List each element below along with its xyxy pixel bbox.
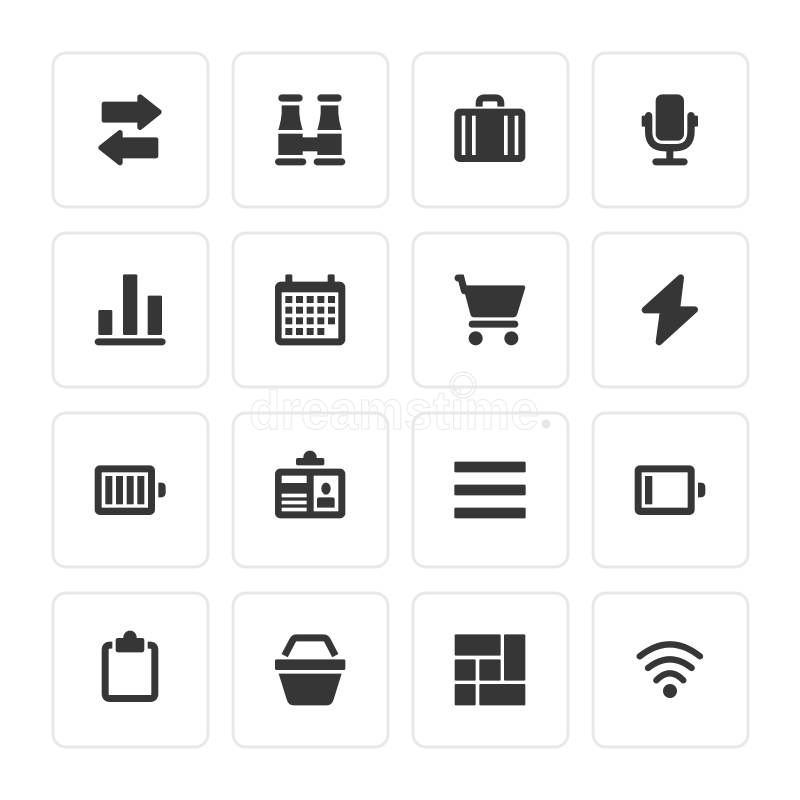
panel: calendar (233, 233, 388, 387)
icon: menu lines (454, 462, 526, 518)
panel: lightning bolt (593, 233, 748, 387)
icon: low battery (635, 465, 705, 515)
icon: clipboard (105, 631, 155, 698)
card frame (413, 593, 568, 747)
card frame (53, 413, 208, 567)
card frame (593, 413, 748, 567)
panel: full battery (53, 413, 208, 567)
card frame (413, 233, 568, 387)
card frame (233, 593, 388, 747)
icon: wifi (640, 644, 700, 698)
icon: microphone (642, 94, 698, 165)
watermark logo rings (450, 372, 476, 398)
card frame (233, 233, 388, 387)
card frame (593, 233, 748, 387)
icon: tile layout (455, 634, 525, 705)
icon: briefcase (454, 98, 525, 162)
panel: menu (413, 413, 568, 567)
panel: wifi (593, 593, 748, 747)
card frame (593, 593, 748, 747)
panel: tile layout (413, 593, 568, 747)
watermark registered mark (542, 420, 550, 428)
icon: basket (275, 638, 345, 705)
icon: full battery (95, 465, 166, 515)
panel: clipboard (53, 593, 208, 747)
icon: lightning bolt (645, 278, 695, 342)
panel: briefcase (413, 53, 568, 207)
card frame (413, 53, 568, 207)
panel: id badge (233, 413, 388, 567)
card frame (233, 53, 388, 207)
panel: bar chart (53, 233, 208, 387)
watermark (249, 372, 550, 441)
card frame (233, 413, 388, 567)
card frame (53, 233, 208, 387)
icon: exchange arrows (101, 97, 159, 163)
card frame (53, 53, 208, 207)
panel: binoculars (233, 53, 388, 207)
icon: bar chart (95, 274, 166, 345)
card frame (53, 593, 208, 747)
panel: microphone (593, 53, 748, 207)
panel: shopping cart (413, 233, 568, 387)
panel: low battery (593, 413, 748, 567)
watermark word: dreamstime (249, 379, 539, 441)
icon: binoculars (275, 94, 345, 165)
panel: basket (233, 593, 388, 747)
icon: shopping cart (458, 278, 525, 345)
icon: id badge (275, 451, 345, 518)
panel: exchange arrows (53, 53, 208, 207)
icon: calendar (275, 274, 345, 345)
card frame (413, 413, 568, 567)
card frame (593, 53, 748, 207)
